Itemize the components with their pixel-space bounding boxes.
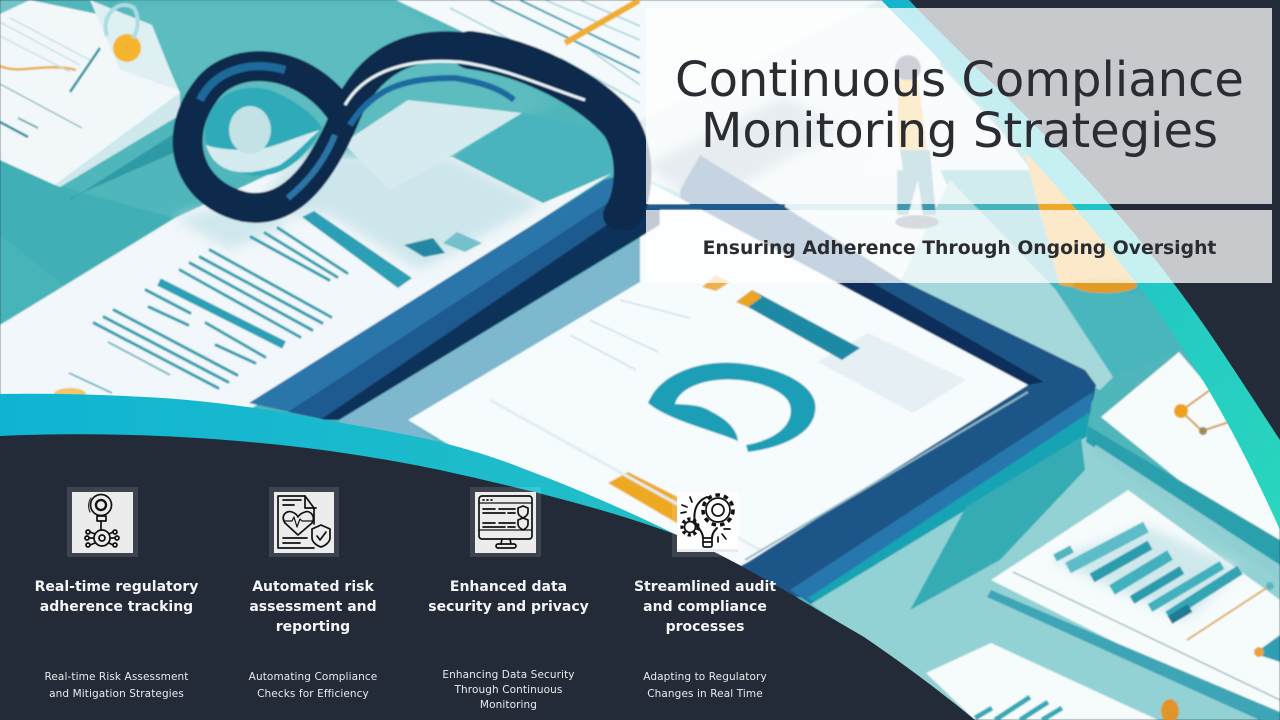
navy corner top right bbox=[909, 0, 1280, 440]
heading: title: Continuous Compliance bbox=[675, 52, 1244, 108]
teal inset beneath the ribbon bbox=[453, 113, 612, 203]
blue band of tablet with shadow bbox=[249, 170, 785, 420]
heading: Enhanced data bbox=[450, 579, 567, 595]
tablet screen with gauge bbox=[339, 177, 1028, 620]
heading: Automated risk bbox=[252, 579, 374, 595]
heading: Streamlined audit bbox=[634, 579, 776, 595]
tablet: pale right field under the title panel bbox=[640, 0, 1180, 390]
description: Through Continuous bbox=[454, 684, 562, 696]
heading: adherence tracking bbox=[40, 599, 193, 615]
description: Monitoring bbox=[480, 699, 537, 711]
description: Real-time Risk Assessment bbox=[44, 671, 189, 683]
description: and Mitigation Strategies bbox=[49, 688, 184, 700]
lower-right teal field bbox=[811, 426, 1280, 720]
column 1: real-time tracking bbox=[35, 487, 198, 700]
heading: reporting bbox=[276, 619, 350, 635]
teal arc bottom bbox=[0, 394, 677, 535]
icon: lightbulb with circuit bbox=[67, 487, 138, 557]
top-centre report sheet bbox=[396, 0, 660, 170]
column 2: automated risk bbox=[249, 487, 377, 700]
icon: document with heart and shield bbox=[269, 487, 339, 557]
heading: processes bbox=[666, 619, 744, 635]
teal arc top right bbox=[881, 0, 1280, 530]
tablet blue frame bbox=[680, 155, 1096, 612]
right report sheet bbox=[1101, 352, 1280, 562]
description: Enhancing Data Security bbox=[442, 669, 575, 681]
panel: title bbox=[646, 8, 1272, 204]
column 4: streamlined audit bbox=[634, 487, 776, 700]
main report sheet bbox=[0, 150, 612, 445]
lower-right report with bar chart bbox=[987, 490, 1280, 720]
icon: monitor with shields bbox=[470, 487, 541, 557]
icon: lightbulb with gears bbox=[672, 487, 743, 557]
top-left report sheet bbox=[0, 0, 180, 187]
infinity ribbon bbox=[188, 46, 633, 215]
navy bottom panel bbox=[0, 434, 975, 720]
subtitle text: Ensuring Adherence Through Ongoing Oversight bbox=[703, 238, 1216, 259]
description: Changes in Real Time bbox=[647, 688, 763, 700]
heading: title: Monitoring Strategies bbox=[701, 103, 1218, 159]
heading: security and privacy bbox=[428, 599, 589, 615]
standing figure and yellow shape behind the title bbox=[865, 55, 1137, 293]
description: Adapting to Regulatory bbox=[643, 671, 767, 683]
description: Checks for Efficiency bbox=[257, 688, 369, 700]
bottom report fragment bbox=[926, 643, 1179, 720]
column 3: enhanced security bbox=[428, 487, 589, 711]
description: Automating Compliance bbox=[249, 671, 377, 683]
heading: and compliance bbox=[643, 599, 767, 615]
panel: subtitle bbox=[646, 210, 1272, 283]
heading: Real-time regulatory bbox=[35, 579, 198, 595]
heading: assessment and bbox=[249, 599, 377, 615]
